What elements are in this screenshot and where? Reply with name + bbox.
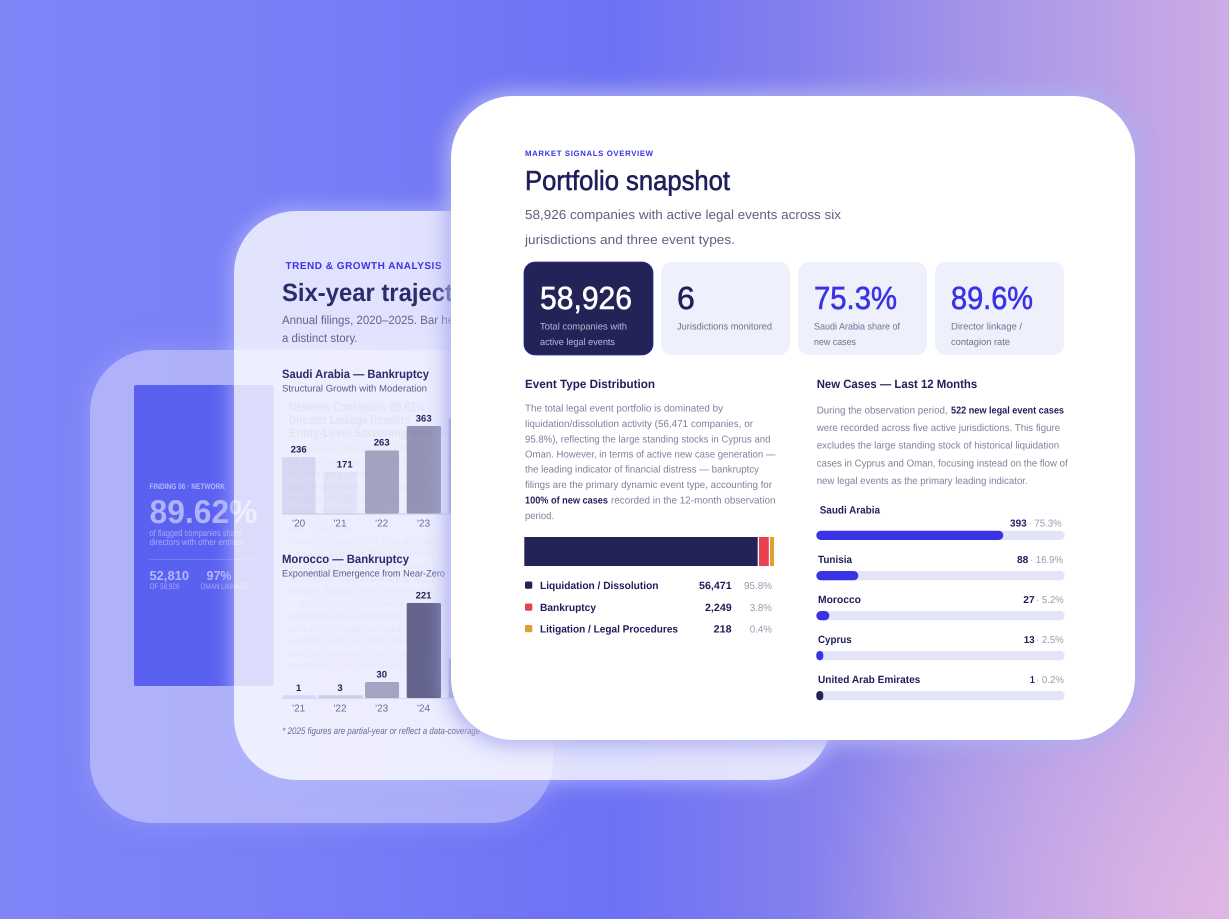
stat tile: total companies <box>524 262 653 355</box>
bar chart: saudi arabia bankruptcy: 363 <box>416 414 432 424</box>
chart heading: morocco bankruptcy: Morocco — Bankruptcy <box>282 552 409 566</box>
text block: event type narrative: the leading indicator of financial distress — bankruptcy <box>525 464 759 476</box>
stat tile: saudi arabia share <box>798 262 927 355</box>
text block: intro: 58,926 companies with active legal events across six <box>525 207 842 222</box>
panel: back card finding 06 network <box>90 350 553 823</box>
text block: event type narrative: filings are the primary dynamic event type, accounting for <box>525 480 773 491</box>
stat tile: total companies: active legal events <box>540 337 615 348</box>
bar row: united arab emirates: 1 <box>1030 675 1035 686</box>
bar row: tunisia: 88 <box>1017 555 1029 566</box>
panel: blue finding block: FINDING 06 · NETWORK <box>150 482 225 491</box>
text block: network contagion body: 58,926 companies with legal events (89.62%) <box>289 456 467 468</box>
text block: new cases narrative <box>816 406 1068 487</box>
eyebrow: market signals overview: MARKET SIGNALS OVERVIEW <box>525 149 654 158</box>
stat tile: total companies: Total companies with <box>540 322 627 332</box>
bar row: cyprus: 13 <box>1024 635 1035 646</box>
bar chart: morocco bankruptcy: 221 <box>416 590 432 602</box>
panel: front card portfolio snapshot <box>451 96 1135 740</box>
panel: blue finding block: OF 58,926 <box>150 582 180 591</box>
text block: network contagion body: counterparty credit assessment. <box>289 660 405 672</box>
text block: new cases narrative: new legal events as the primary leading indicator. <box>817 476 1028 487</box>
stat tile: saudi arabia share: 75.3% <box>814 280 897 316</box>
bar row: saudi arabia: 393 <box>1010 518 1027 530</box>
bar chart: saudi arabia bankruptcy: 263 <box>374 438 390 448</box>
panel: blue finding block: OMAN LINKAGE <box>200 582 248 591</box>
bar chart: saudi arabia bankruptcy: '23 <box>417 518 430 530</box>
bar chart: morocco bankruptcy: '21 <box>292 704 306 714</box>
text block: intro <box>524 207 842 247</box>
text block: network contagion heading: Network Contagion: 89.62% <box>289 400 425 414</box>
stat tile: jurisdictions <box>661 262 790 355</box>
heading: new cases last 12 months: New Cases — Last 12 Months <box>817 377 978 391</box>
panel: blue finding block: 97% <box>206 568 232 583</box>
bar chart: saudi arabia bankruptcy: 171 <box>337 460 353 470</box>
panel: blue finding block: directors with other entities <box>150 537 244 547</box>
bar row: tunisia: Tunisia <box>818 554 852 566</box>
text block: intro: jurisdictions and three event types. <box>524 232 735 247</box>
panel: blue finding block: 89.62% <box>150 493 258 530</box>
bar chart: saudi arabia bankruptcy: '21 <box>333 518 347 530</box>
chart heading: saudi arabia bankruptcy: Saudi Arabia — Bankruptcy <box>282 367 429 381</box>
bar chart: morocco bankruptcy: '23 <box>375 704 389 714</box>
legend: liquidation: 56,471 <box>699 580 732 592</box>
eyebrow: trend and growth analysis: TREND & GROWTH ANALYSIS <box>286 261 442 272</box>
legend: litigation <box>525 624 772 636</box>
text block: event type narrative: liquidation/dissolution activity (56,471 companies, or <box>525 419 754 430</box>
stat tile: jurisdictions: 6 <box>677 280 695 316</box>
heading: six-year trajectory: Six-year trajectory <box>282 279 490 307</box>
text block: network contagion body: director who sits on five other boards becomes <box>289 560 467 572</box>
text block: chart intro: Annual filings, 2020–2025. Bar heights tell <box>282 313 496 327</box>
panel: blue finding block <box>134 385 274 686</box>
bar row: united arab emirates <box>816 674 1065 700</box>
bar row: morocco: 27 <box>1023 595 1035 606</box>
text block: event type narrative <box>525 404 776 522</box>
legend: litigation: Litigation / Legal Procedures <box>540 624 678 636</box>
panel: middle card trend and growth analysis <box>234 211 832 780</box>
text block: network contagion body: Cedar Rose's data linkage analysis reveals that <box>289 443 467 455</box>
text block: network contagion body: reinforces the analytical value of Cedar Rose's <box>289 623 467 635</box>
legend: bankruptcy: Bankruptcy <box>540 602 596 614</box>
stat tile: director linkage: Director linkage / <box>951 322 1022 332</box>
text block: event type narrative: The total legal event portfolio is dominated by <box>525 404 723 414</box>
bar chart: saudi arabia bankruptcy: 236 <box>291 444 307 456</box>
footnote: * 2025 figures are partial-year or reflect a data-coverage <box>282 726 480 737</box>
text block: network contagion body: both shareholder and director linkage rates <box>289 481 467 493</box>
panel: blue finding block: 52,810 <box>150 568 189 583</box>
stat tile: jurisdictions: Jurisdictions monitored <box>677 322 772 332</box>
text block: network contagion body: or managers connected to other registered <box>289 468 467 480</box>
stat tile: saudi arabia share: new cases <box>814 337 856 348</box>
legend: litigation: 218 <box>714 624 732 636</box>
text block: new cases narrative: 522 new legal event cases <box>951 406 1064 416</box>
legend: bankruptcy <box>525 602 772 614</box>
bar row: morocco <box>816 594 1065 620</box>
bar row: tunisia: · 16.9% <box>1030 555 1063 566</box>
text block: network contagion body: broader corporate network. <box>289 506 386 518</box>
text block: network contagion body: sanctions screening, beneficial ownership anal <box>289 648 467 660</box>
bar row: saudi arabia <box>816 504 1065 540</box>
text block: network contagion body: WHY IT MATTERS <box>289 524 352 534</box>
text block: event type narrative: period. <box>525 511 554 522</box>
bar row: united arab emirates: · 0.2% <box>1036 675 1064 686</box>
bar chart: saudi arabia bankruptcy: '20 <box>292 518 306 530</box>
text block: event type narrative: 95.8%), reflecting the large standing stocks in Cyprus and <box>525 434 770 446</box>
text block: event type narrative: Oman. However, in terms of active new case generation — <box>525 450 776 460</box>
bar chart: saudi arabia bankruptcy <box>282 414 483 530</box>
stat tile: director linkage: 89.6% <box>951 280 1033 316</box>
stat tile: director linkage <box>935 262 1064 355</box>
chart heading: saudi arabia bankruptcy: Structural Growth with Moderation <box>282 384 427 394</box>
legend: liquidation <box>525 580 772 592</box>
bar row: morocco: Morocco <box>818 594 861 606</box>
bar row: cyprus <box>816 634 1065 660</box>
stat tile: total companies: 58,926 <box>540 280 632 316</box>
bar row: morocco: · 5.2% <box>1036 595 1064 606</box>
stat tile: saudi arabia share: Saudi Arabia share of <box>814 322 900 332</box>
text block: chart intro: a distinct story. <box>282 331 358 345</box>
bar chart: morocco bankruptcy: 3 <box>337 683 343 694</box>
text block: network contagion body: corporate legal risk. When a company enters l <box>289 548 467 560</box>
text block: new cases narrative: cases in Cyprus and Oman, focusing instead on the flow of <box>817 458 1068 470</box>
text block: chart intro <box>282 313 496 345</box>
bar row: saudi arabia: · 75.3% <box>1028 518 1062 530</box>
bar row: saudi arabia: Saudi Arabia <box>820 504 880 516</box>
bar row: cyprus: · 2.5% <box>1036 635 1064 646</box>
heading: portfolio snapshot: Portfolio snapshot <box>525 165 730 196</box>
bar row: tunisia <box>816 554 1065 580</box>
bar chart: morocco bankruptcy: 1 <box>296 683 302 694</box>
text block: new cases narrative: excludes the large standing stock of historical liquidation <box>817 440 1059 452</box>
chart heading: morocco bankruptcy <box>282 552 445 580</box>
legend: liquidation: 95.8% <box>744 581 772 592</box>
stat tile: director linkage: contagion rate <box>951 337 1010 348</box>
bar row: united arab emirates: United Arab Emirates <box>818 674 920 686</box>
chart heading: saudi arabia bankruptcy <box>282 367 429 394</box>
panel: blue finding block: of flagged companies share <box>150 528 242 538</box>
legend: liquidation: Liquidation / Dissolution <box>540 580 658 592</box>
stacked bar: event type distribution <box>524 537 774 566</box>
text block: network contagion body: — without mapping its ownership and governan <box>289 598 467 610</box>
legend: litigation: 0.4% <box>750 624 772 636</box>
bar chart: morocco bankruptcy: 30 <box>376 670 387 680</box>
text block: event type narrative: recorded in the 12-month observation <box>611 496 776 506</box>
bar chart: saudi arabia bankruptcy: '22 <box>375 518 389 530</box>
bar chart: morocco bankruptcy: '22 <box>333 704 347 714</box>
text block: network contagion heading <box>289 400 470 440</box>
text block: network contagion body <box>289 443 467 672</box>
bar chart: morocco bankruptcy: '24 <box>417 704 430 714</box>
text block: network contagion body: meaning virtually every flagged company is co <box>289 493 467 505</box>
chart heading: morocco bankruptcy: Exponential Emergence from Near-Zero <box>282 568 445 580</box>
text block: network contagion body: reputational, legal, and financial exposure acro <box>289 573 467 585</box>
text block: network contagion body: network. Standard KYB processes that evaluate <box>289 585 467 597</box>
text block: network contagion heading: Director Linkage Renders <box>289 413 410 427</box>
text block: network contagion body: systematically underestimate true exposure. T <box>289 610 467 622</box>
bar row: cyprus: Cyprus <box>818 634 852 646</box>
heading: event type distribution: Event Type Distribution <box>525 377 655 391</box>
text block: new cases narrative: During the observation period, <box>817 406 948 416</box>
bar chart: morocco bankruptcy <box>282 590 483 714</box>
text block: network contagion heading: Entity-Level Screening Insufficient <box>289 426 470 440</box>
text block: network contagion body: capability and has direct implications for finan <box>289 635 467 647</box>
legend: bankruptcy: 2,249 <box>705 602 732 614</box>
text block: network contagion body: Network contagion is the most underappreciated <box>289 535 467 547</box>
text block: new cases narrative: were recorded across five active jurisdictions. This figure <box>816 423 1061 434</box>
legend: bankruptcy: 3.8% <box>750 603 772 614</box>
text block: event type narrative: 100% of new cases <box>525 496 608 506</box>
